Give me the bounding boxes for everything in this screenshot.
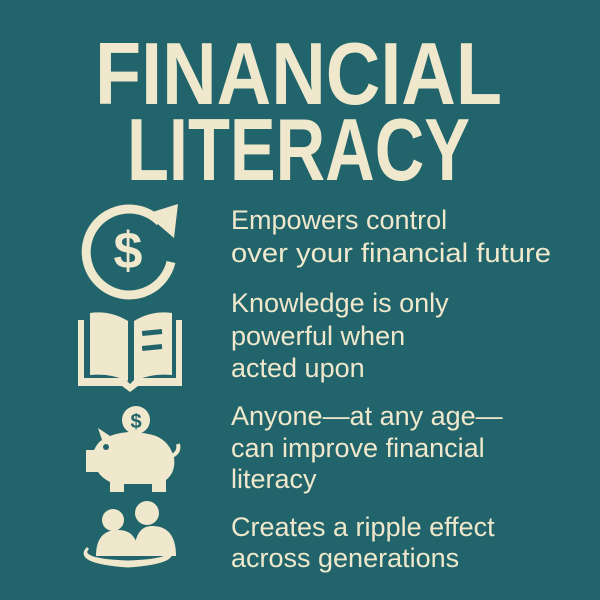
icon: circular dollar arrow: $ — [114, 222, 143, 280]
text: item 2: powerful when — [231, 321, 405, 351]
text: item 2 — [231, 288, 449, 383]
text: item 2: Knowledge is only — [231, 288, 449, 318]
icon: circular dollar arrow — [86, 204, 178, 295]
text: item 1: Empowers control — [231, 205, 447, 235]
icon: people — [85, 501, 176, 566]
text: item 2: acted upon — [231, 353, 365, 383]
text: item 1 — [231, 205, 551, 268]
title — [95, 24, 502, 199]
icon: piggy bank with coin: $ — [130, 411, 142, 433]
text: item 3 — [231, 401, 503, 494]
text: item 4: across generations — [231, 543, 459, 573]
text: item 4 — [231, 512, 495, 573]
text: item 3: can improve financial — [231, 433, 485, 463]
text: item 1: over your financial future — [231, 238, 551, 268]
icon: piggy bank with coin — [86, 406, 178, 492]
text: item 4: Creates a ripple effect — [231, 512, 495, 542]
text: item 3: Anyone—at any age— — [231, 401, 503, 431]
title: LITERACY — [127, 100, 470, 199]
text: item 3: literacy — [231, 464, 317, 494]
text blocks — [231, 205, 551, 573]
title: FINANCIAL — [95, 24, 502, 123]
icon: open book — [78, 312, 182, 392]
